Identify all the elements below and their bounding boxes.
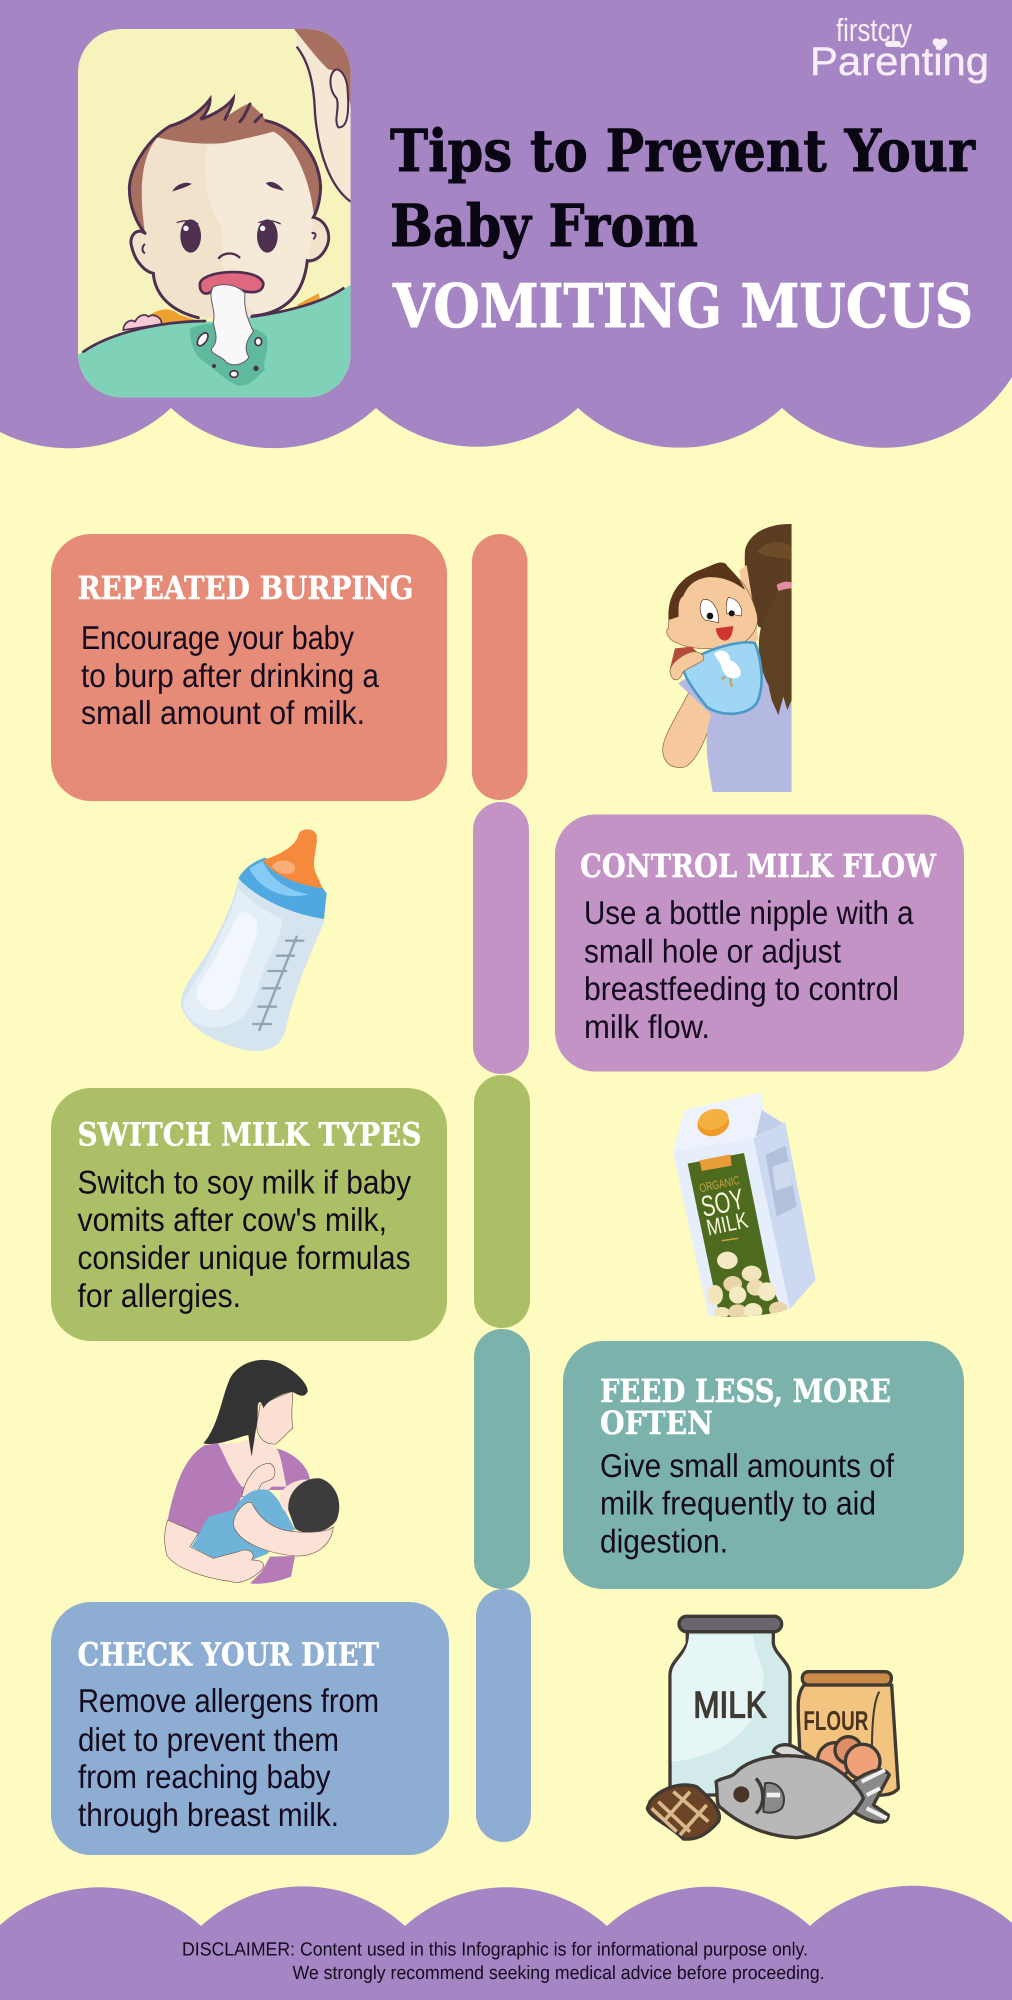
panel: check your diet: from reaching baby bbox=[78, 1758, 331, 1795]
illustration: milk, flour, fish and nuts: FLOUR bbox=[803, 1706, 868, 1736]
timeline pill 3 bbox=[474, 1075, 530, 1328]
panel: feed less, more often: FEED LESS, MORE bbox=[600, 1372, 891, 1410]
panel: switch milk types bbox=[51, 1088, 447, 1341]
logo: FirstCry Parenting bbox=[810, 12, 989, 84]
timeline pill 1 bbox=[472, 534, 528, 800]
footer scalloped banner bbox=[0, 1886, 1012, 2000]
illustration: baby vomiting bbox=[78, 29, 351, 398]
illustration: baby bottle bbox=[181, 829, 327, 1051]
illustration: soy milk carton: ORGANIC bbox=[698, 1173, 741, 1195]
illustration: mother burping baby bbox=[663, 524, 792, 792]
panel: control milk flow: breastfeeding to control bbox=[584, 970, 899, 1007]
panel: repeated burping: small amount of milk. bbox=[81, 694, 365, 731]
illustration: milk, flour, fish and nuts: MILK bbox=[693, 1684, 767, 1726]
panel: feed less, more often bbox=[563, 1341, 964, 1589]
illustration: soy milk carton: SOY bbox=[698, 1182, 747, 1223]
illustration: soy milk carton bbox=[673, 1092, 816, 1319]
title: Baby From bbox=[390, 192, 698, 260]
panel: feed less, more often: milk frequently to aid bbox=[600, 1484, 876, 1522]
panel: feed less, more often: digestion. bbox=[600, 1522, 728, 1560]
timeline pill 5 bbox=[476, 1589, 531, 1842]
logo: FirstCry Parenting: Parenting bbox=[810, 40, 989, 84]
panel: feed less, more often: OFTEN bbox=[600, 1404, 713, 1442]
title bbox=[390, 117, 976, 342]
panel: switch milk types: SWITCH MILK TYPES bbox=[78, 1116, 422, 1154]
panel: check your diet bbox=[51, 1602, 449, 1855]
panel: switch milk types: for allergies. bbox=[78, 1277, 241, 1314]
timeline pill 4 bbox=[474, 1329, 530, 1589]
panel: control milk flow: small hole or adjust bbox=[584, 932, 841, 970]
illustration: mother breastfeeding bbox=[165, 1360, 339, 1584]
panel: switch milk types: vomits after cow's milk, bbox=[78, 1201, 387, 1238]
disclaimer text: We strongly recommend seeking medical advice before proceeding. bbox=[292, 1963, 824, 1984]
panel: repeated burping bbox=[51, 534, 447, 801]
illustration: milk, flour, fish and nuts bbox=[647, 1616, 898, 1839]
panel: repeated burping: to burp after drinking a bbox=[81, 657, 380, 694]
panel: repeated burping: REPEATED BURPING bbox=[78, 569, 414, 607]
disclaimer text: DISCLAIMER: Content used in this Infographic is for informational purpose only. bbox=[182, 1940, 808, 1960]
panel: check your diet: diet to prevent them bbox=[78, 1721, 339, 1758]
disclaimer text bbox=[182, 1940, 824, 1984]
logo: FirstCry Parenting: firstcry bbox=[836, 12, 912, 48]
panel: switch milk types: Switch to soy milk if baby bbox=[78, 1164, 411, 1200]
panel: check your diet: Remove allergens from bbox=[78, 1682, 379, 1719]
panel: check your diet: CHECK YOUR DIET bbox=[78, 1636, 379, 1674]
timeline pill 2 bbox=[473, 802, 529, 1074]
panel: repeated burping: Encourage your baby bbox=[81, 619, 354, 656]
panel: control milk flow bbox=[555, 814, 964, 1072]
panel: switch milk types: consider unique formulas bbox=[78, 1239, 410, 1276]
panel: control milk flow: CONTROL MILK FLOW bbox=[580, 847, 937, 885]
panel: feed less, more often: Give small amounts of bbox=[600, 1447, 895, 1484]
panel: check your diet: through breast milk. bbox=[78, 1796, 339, 1833]
illustration: soy milk carton: MILK bbox=[704, 1207, 750, 1241]
panel: control milk flow: milk flow. bbox=[584, 1008, 710, 1045]
panel: control milk flow: Use a bottle nipple with a bbox=[584, 894, 914, 931]
header scalloped banner bbox=[0, 0, 1012, 448]
